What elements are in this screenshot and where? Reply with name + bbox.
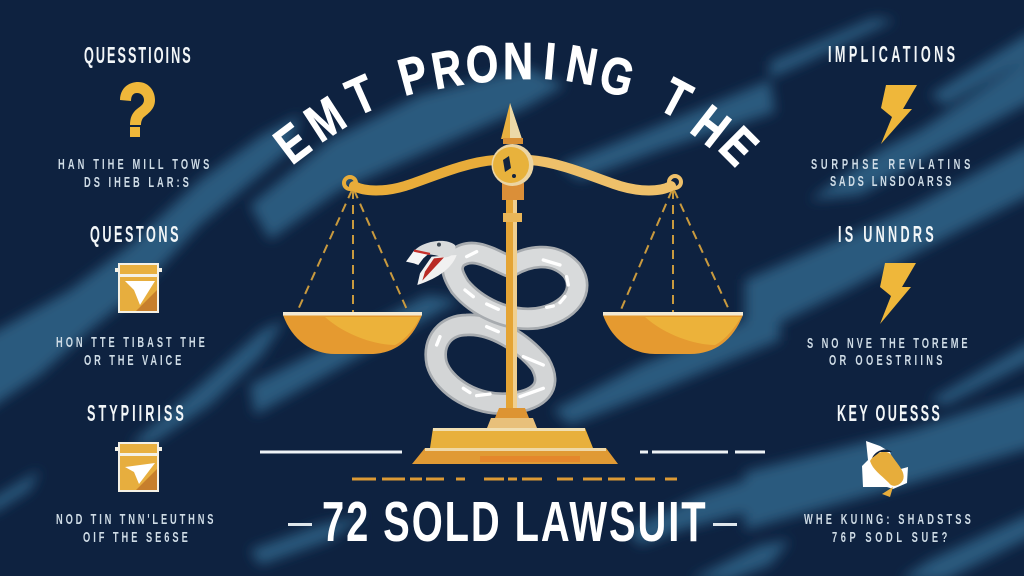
description: NOD TIN TNN'LEUTHNS	[56, 511, 213, 528]
scale beam	[344, 160, 681, 190]
description: HAN TIHE MILL TOWS	[58, 156, 209, 173]
right item 2: OR OOESTRIINS	[829, 352, 942, 369]
left item 1	[58, 42, 209, 191]
icon: box	[115, 442, 162, 492]
title arc: upper headline: O	[464, 33, 500, 94]
snake coiled around the scale	[406, 241, 577, 404]
hub	[492, 144, 534, 186]
left item 3: OIF THE SE6SE	[83, 529, 188, 546]
right item 3	[804, 400, 971, 546]
bottom title: 72 SOLD LAWSUIT	[322, 490, 706, 554]
title arc: upper headline: T	[651, 66, 701, 130]
title arc: upper headline: N	[503, 32, 533, 90]
stepped base	[412, 408, 618, 464]
title arc: upper headline: I	[542, 31, 558, 90]
icon: question mark	[120, 82, 155, 137]
description: SURPHSE REVLATINS	[811, 156, 970, 173]
balance scale	[283, 103, 743, 464]
left item 2	[56, 221, 205, 369]
snake head	[406, 241, 457, 285]
heading: IMPLICATIONS	[828, 41, 955, 67]
pole	[506, 195, 517, 410]
left item 3	[56, 400, 213, 546]
right pan	[603, 312, 743, 354]
icon: box	[115, 263, 162, 313]
icon: lightning bolt	[881, 85, 917, 144]
heading: STYPIIRISS	[87, 400, 184, 426]
left pan	[283, 312, 422, 354]
icon: lightning bolt	[880, 263, 916, 324]
finial	[501, 103, 522, 139]
title arc: upper headline: T	[337, 63, 385, 127]
description: S NO NVE THE TOREME	[807, 335, 968, 352]
right item 3: 76P SODL SUE?	[832, 529, 947, 546]
title arc: upper headline: M	[294, 85, 355, 153]
title arc: upper headline: E	[263, 111, 321, 175]
right item 2	[807, 221, 968, 369]
right item 1: SADS LNSDOARSS	[830, 173, 952, 190]
description: HON TTE TIBAST THE	[56, 334, 205, 351]
description: WHE KUING: SHADSTSS	[804, 511, 971, 528]
left item 1: DS IHEB LAR:S	[84, 174, 189, 191]
title arc: upper headline: E	[709, 115, 770, 176]
title arc: upper headline: P	[392, 43, 434, 107]
right item 1	[811, 41, 970, 190]
heading: QUESSTIOINS	[84, 42, 191, 68]
title arc: upper headline: H	[681, 94, 741, 158]
heading: IS UNNDRS	[838, 221, 934, 247]
title arc: upper headline: N	[562, 33, 602, 96]
title arc: upper headline: G	[594, 43, 640, 108]
heading: KEY OUESSS	[837, 400, 940, 426]
title arc: upper headline: R	[427, 37, 467, 100]
orange dashes under the base	[352, 478, 677, 480]
rule lines flanking the base	[260, 450, 765, 454]
scale strings	[297, 190, 730, 312]
left item 2: OR THE VAICE	[84, 352, 181, 369]
icon: torn paper with gold shape	[862, 441, 908, 497]
title arc: upper headline	[263, 31, 770, 176]
heading: QUESTONS	[90, 221, 179, 247]
